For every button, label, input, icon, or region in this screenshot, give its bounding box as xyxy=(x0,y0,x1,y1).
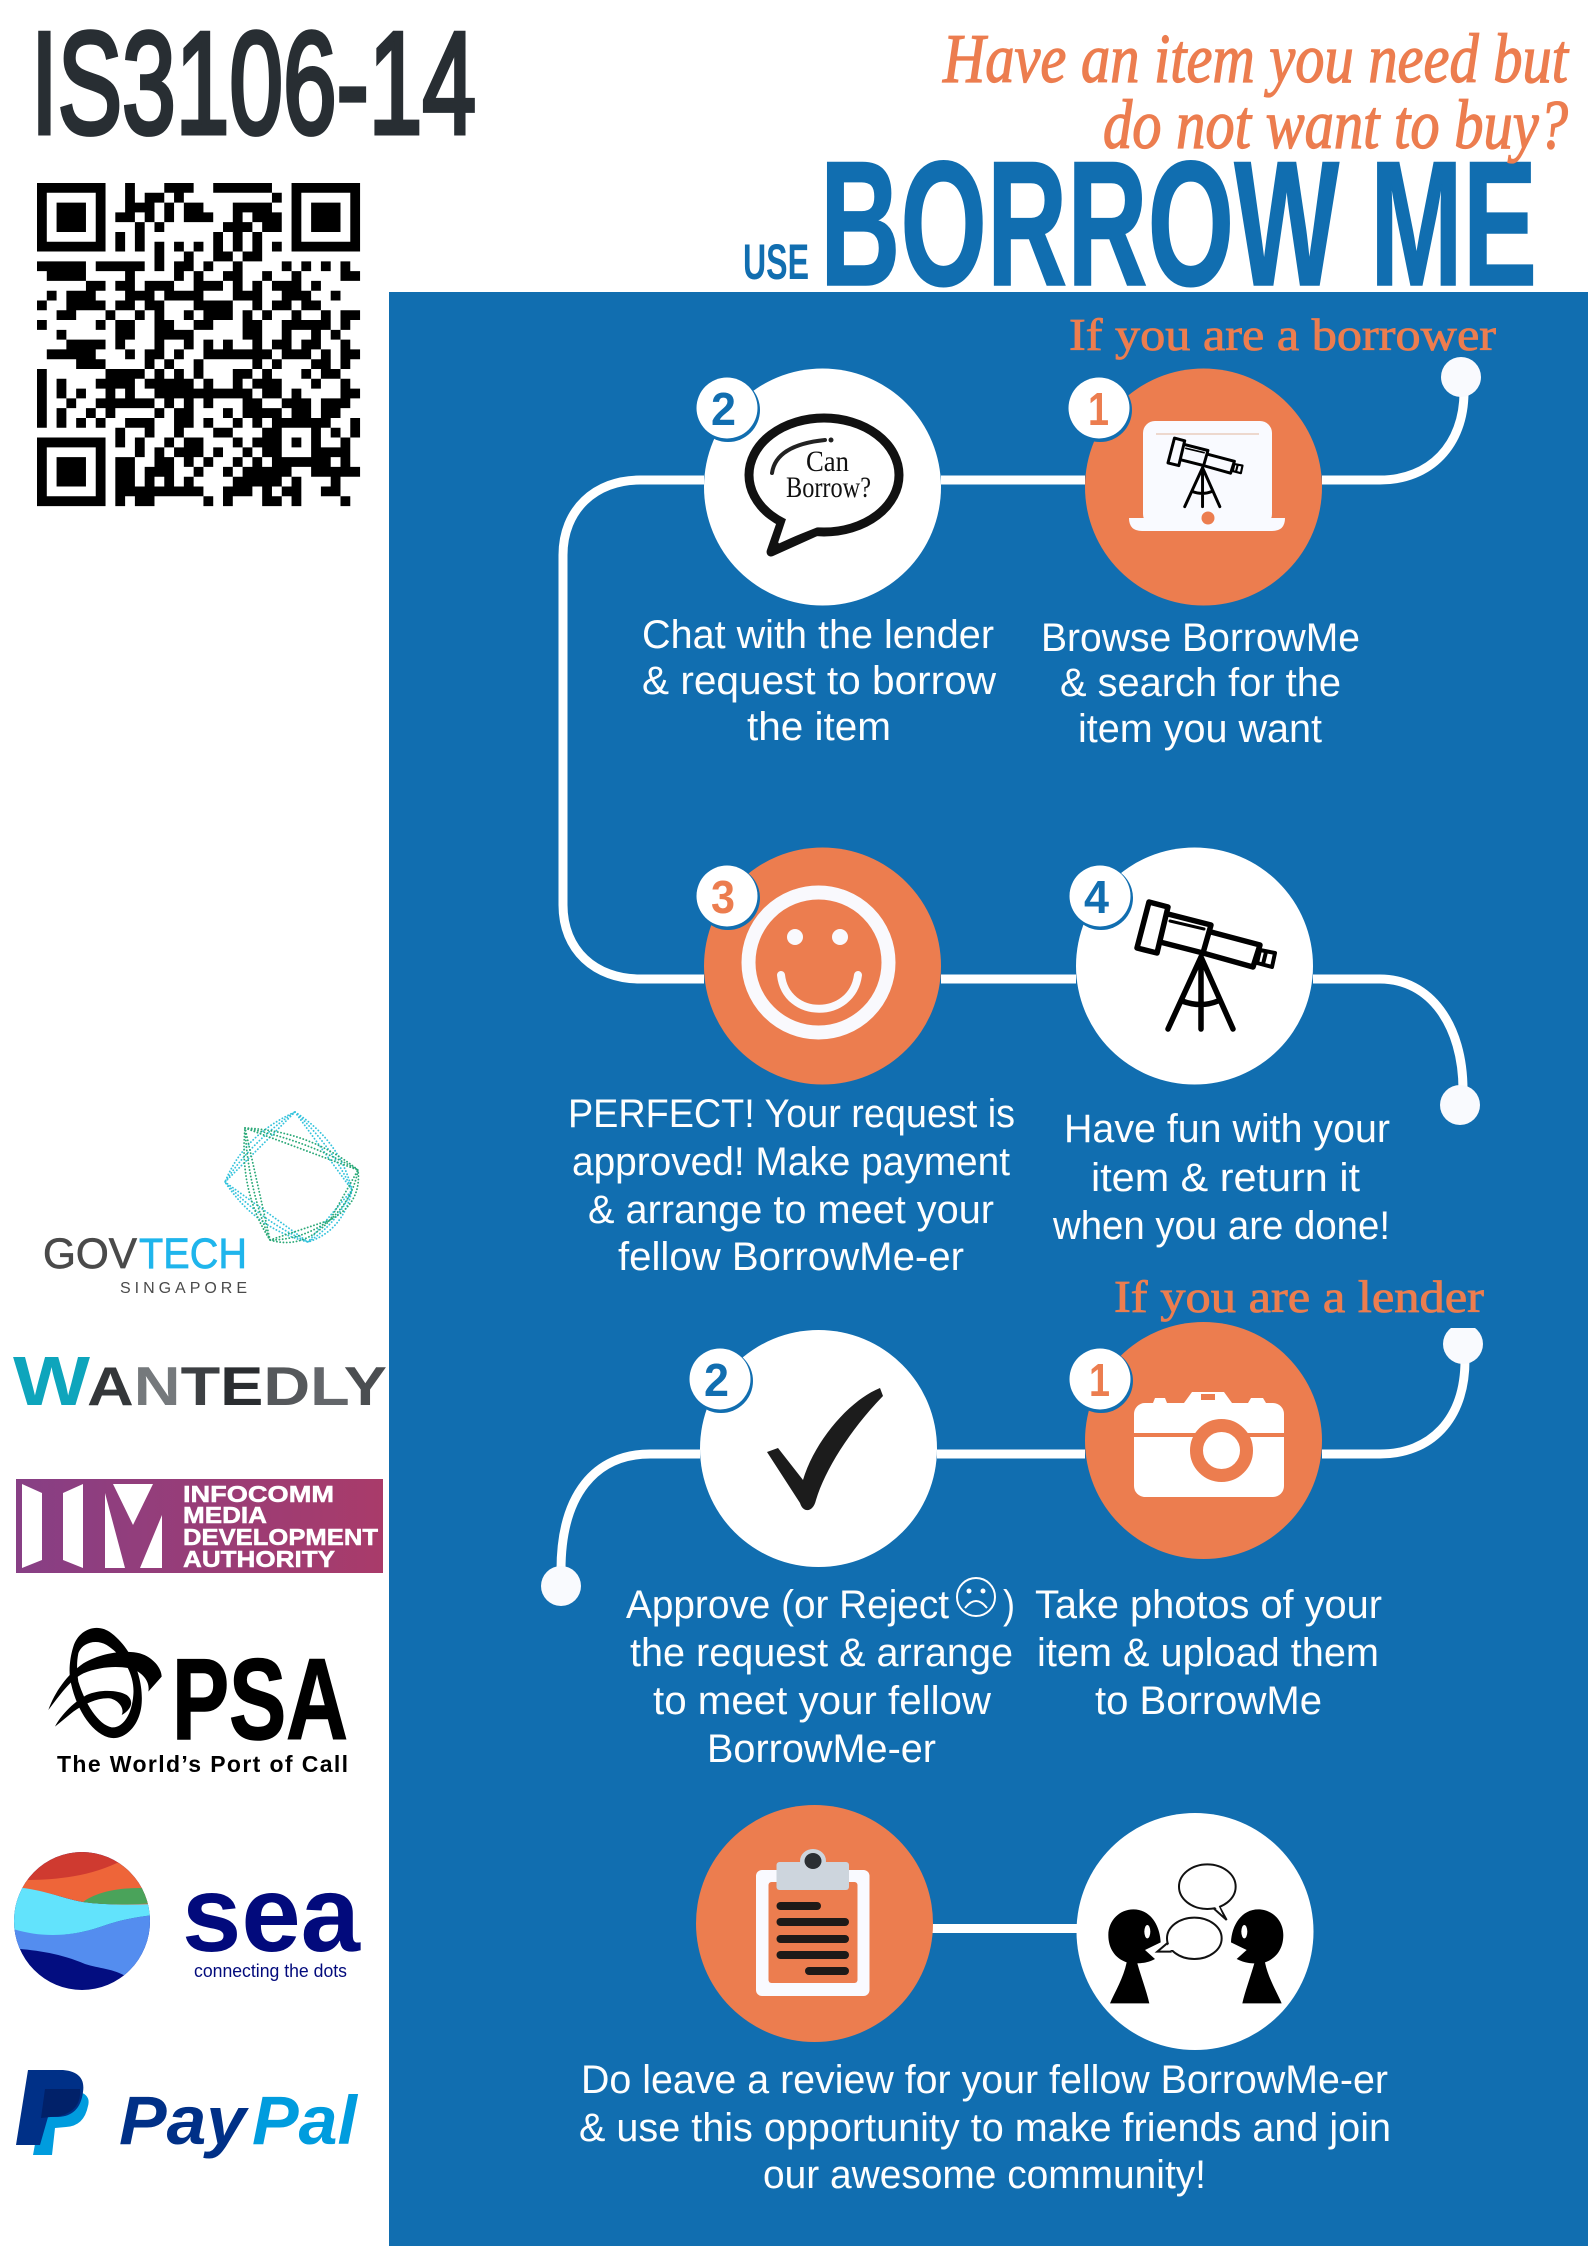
course code title: IS3106-14 xyxy=(31,2,476,164)
text: borrower 4: Have fun with your xyxy=(1064,1107,1390,1151)
step: lender 1 photos xyxy=(1069,1322,1322,1559)
logo: Wantedly xyxy=(13,1342,387,1420)
step: borrower 3 approved xyxy=(696,848,941,1084)
text: borrower 3: & arrange to meet your xyxy=(588,1188,994,1232)
logo: Sea: connecting the dots xyxy=(194,1961,347,1981)
end dot: lender xyxy=(541,1566,581,1606)
icon: camera xyxy=(1134,1392,1284,1497)
text: borrower 3: PERFECT! Your request is xyxy=(568,1092,1015,1136)
icon: speech bubble xyxy=(749,418,899,552)
logo: GovTech Singapore: SINGAPORE xyxy=(120,1280,247,1297)
text: lender 2 xyxy=(626,1578,1015,1771)
icon: two people with speech bubbles xyxy=(1108,1864,1283,2003)
logo: PayPal xyxy=(16,2070,359,2159)
icon: sad face xyxy=(957,1578,995,1616)
text: lender 1 xyxy=(1035,1583,1382,1723)
panel: blue steps background xyxy=(389,292,1588,2246)
text: borrower 2: Chat with the lender xyxy=(642,613,994,657)
logo: Infocomm Media Development Authority xyxy=(16,1479,383,1573)
logo: Wantedly: ANTEDLY xyxy=(87,1355,387,1417)
logo: Sea xyxy=(10,1850,361,1995)
icon: speech bubble: Can xyxy=(806,445,849,478)
badge 1 xyxy=(1069,1348,1133,1413)
badge 3 xyxy=(696,866,760,930)
logo: Infocomm Media Development Authority: MEDIA xyxy=(183,1502,267,1528)
connector: borrower path xyxy=(563,392,1464,1090)
text: lender 1: to BorrowMe xyxy=(1095,1679,1322,1723)
text: lender 2: ) xyxy=(1003,1583,1015,1627)
text: borrower 1: & search for the xyxy=(1060,661,1341,705)
step: borrower 4 telescope xyxy=(1069,848,1313,1084)
heading: if you are a borrower: If you are a borrower xyxy=(1069,310,1496,360)
logo: Wantedly: W xyxy=(13,1342,90,1420)
text: borrower 2: & request to borrow xyxy=(642,659,996,703)
icon: check mark xyxy=(767,1388,883,1510)
text: review: & use this opportunity to make friends and join xyxy=(579,2106,1391,2150)
badge 3: 3 xyxy=(711,871,735,923)
text: review: Do leave a review for your fellow BorrowMe-er xyxy=(581,2058,1388,2102)
logo: GovTech Singapore: GOV xyxy=(43,1230,137,1278)
text: borrower 4: item & return it xyxy=(1091,1156,1360,1200)
badge 4: 4 xyxy=(1084,871,1109,923)
heading: if you are a lender: If you are a lender xyxy=(1114,1272,1484,1322)
text: borrower 2: the item xyxy=(747,705,891,749)
icon: smiley xyxy=(748,892,888,1032)
text: borrower 1: Browse BorrowMe xyxy=(1041,616,1360,660)
heading: Use Borrow Me: USE xyxy=(743,234,809,290)
text: lender 2: Approve (or Reject xyxy=(626,1583,949,1627)
logo: PayPal: Pay xyxy=(119,2082,250,2159)
text: borrower 2 xyxy=(642,613,996,749)
logo: Infocomm Media Development Authority: DEVELOPMENT xyxy=(183,1524,378,1550)
icon: clipboard xyxy=(756,1849,870,1996)
step: lender 2 approve xyxy=(689,1330,937,1567)
badge 4 xyxy=(1069,866,1133,930)
connector: review xyxy=(932,1924,1077,1933)
step: borrower 2 chat xyxy=(696,368,941,606)
badge 1 xyxy=(1068,378,1132,442)
start dot: lender xyxy=(1443,1324,1483,1364)
badge 1: 1 xyxy=(1088,383,1109,435)
text: borrower 3 xyxy=(568,1092,1015,1279)
step: borrower 1 browse xyxy=(1068,368,1322,606)
end dot: borrower xyxy=(1440,1085,1480,1125)
logo: GovTech Singapore: TECH xyxy=(139,1230,247,1278)
logo: Sea: sea xyxy=(182,1853,361,1974)
connector: lender path xyxy=(561,1360,1465,1570)
text: borrower 1 xyxy=(1041,616,1360,751)
text: borrower 3: approved! Make payment xyxy=(572,1140,1010,1184)
logo: PSA: The World’s Port of Call xyxy=(57,1751,348,1777)
text: lender 2: BorrowMe-er xyxy=(707,1727,936,1771)
logo: Infocomm Media Development Authority: AUTHORITY xyxy=(183,1546,335,1572)
text: borrower 1: item you want xyxy=(1078,707,1322,751)
logo: PSA xyxy=(48,1628,348,1777)
text: lender 2: to meet your fellow xyxy=(653,1679,991,1723)
text: lender 1: item & upload them xyxy=(1037,1631,1379,1675)
text: borrower 3: fellow BorrowMe-er xyxy=(618,1235,964,1279)
icon: telescope xyxy=(1137,902,1275,1029)
step: review clipboard xyxy=(696,1805,933,2042)
badge 1: 1 xyxy=(1089,1354,1110,1406)
logo: Infocomm Media Development Authority: INFOCOMM xyxy=(183,1481,334,1507)
badge 2: 2 xyxy=(711,383,736,435)
badge 2 xyxy=(696,378,760,442)
logo: GovTech Singapore xyxy=(43,1112,358,1297)
dotted star emblem xyxy=(225,1112,358,1242)
text: review: our awesome community! xyxy=(763,2153,1206,2197)
text: borrower 4 xyxy=(1052,1107,1390,1248)
QR code xyxy=(37,183,360,506)
start dot: borrower xyxy=(1441,357,1481,397)
logo: PSA: PSA xyxy=(172,1636,348,1764)
text: review xyxy=(579,2058,1391,2197)
step: review people talking xyxy=(1076,1813,1314,2050)
badge 2 xyxy=(689,1348,753,1413)
text: lender 1: Take photos of your xyxy=(1035,1583,1382,1627)
text: lender 2: the request & arrange xyxy=(630,1631,1013,1675)
logo: PayPal: Pal xyxy=(252,2082,359,2159)
tagline xyxy=(942,21,1569,164)
icon: laptop with telescope xyxy=(1129,421,1285,531)
text: borrower 4: when you are done! xyxy=(1052,1204,1390,1248)
icon: speech bubble: Borrow? xyxy=(786,471,871,504)
badge 2: 2 xyxy=(704,1354,729,1406)
